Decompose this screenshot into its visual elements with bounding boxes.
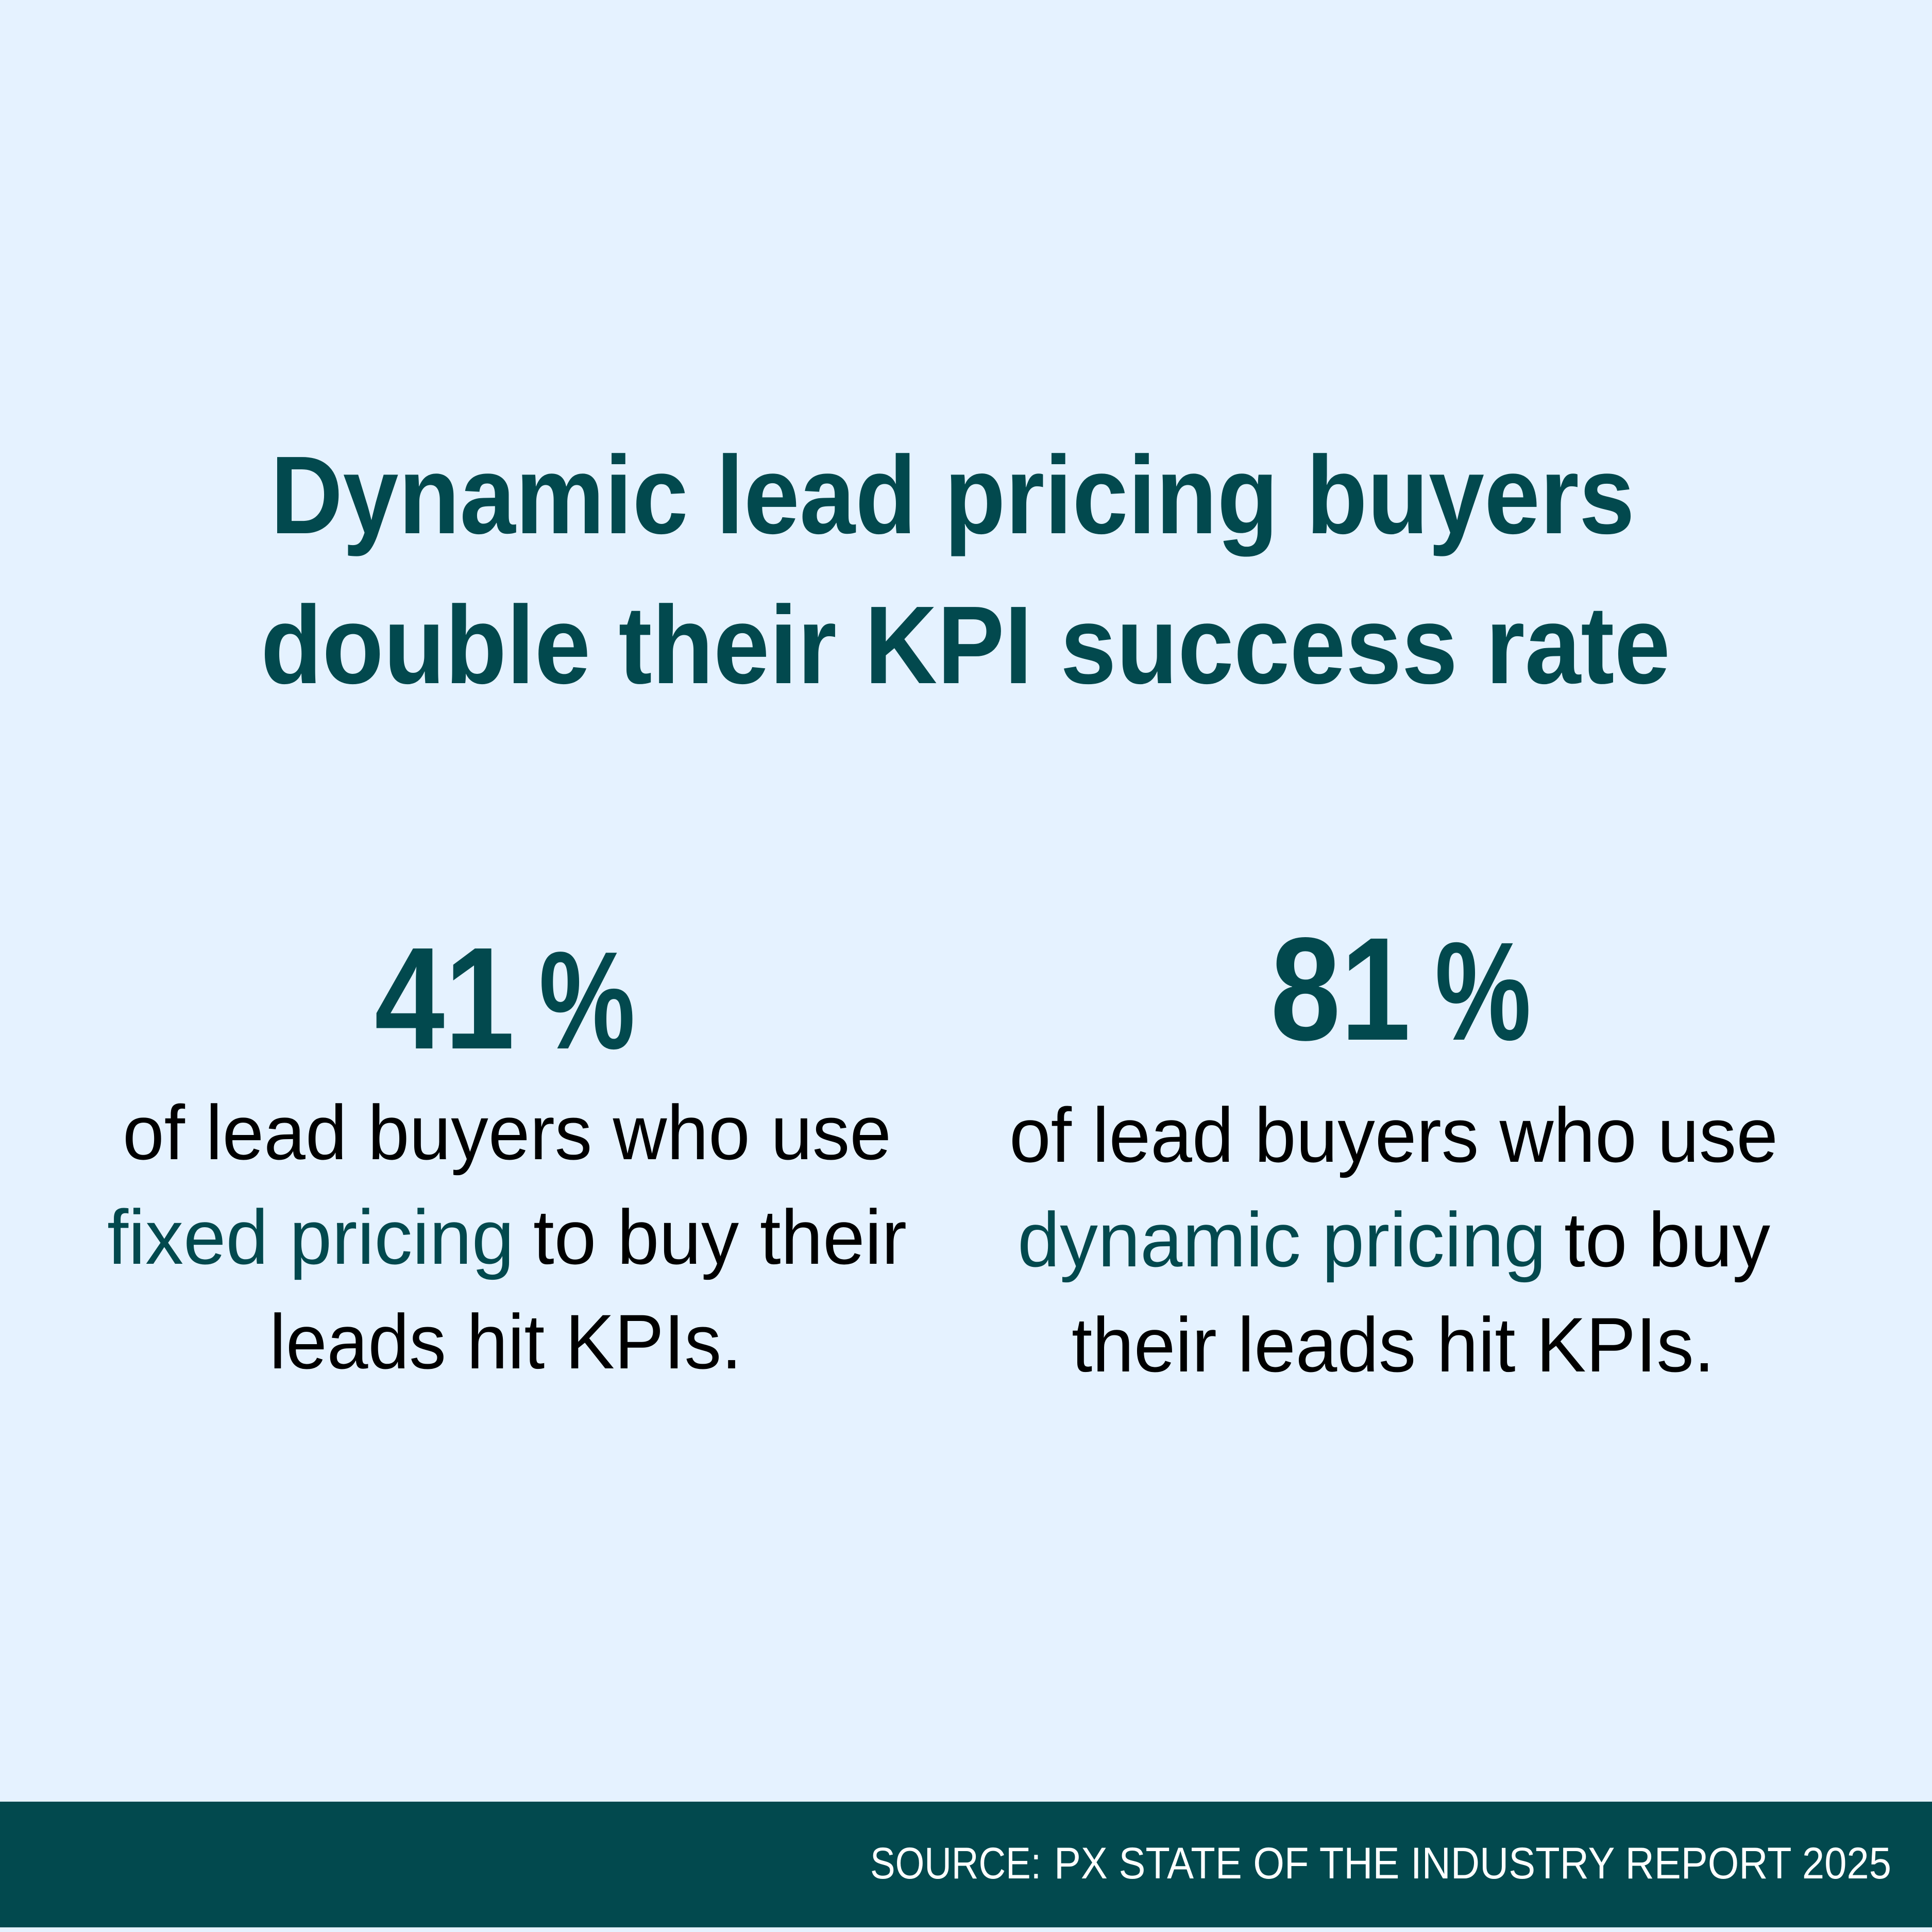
- text block: fixed pricing description: to buy their: [533, 1194, 907, 1280]
- text block: dynamic pricing description: to buy: [1564, 1196, 1770, 1283]
- stat: 81%: [1270, 907, 1531, 1071]
- text block: dynamic pricing description: dynamic pricing: [1018, 1196, 1546, 1283]
- footer band: [0, 1802, 1932, 1927]
- text block: fixed pricing description: of lead buyers who use: [123, 1089, 891, 1176]
- stat: 41%: 41: [375, 917, 515, 1079]
- source note: SOURCE:: [870, 1839, 1041, 1888]
- title: double their KPI success rate: [261, 583, 1670, 707]
- text block: fixed pricing description: [107, 1089, 907, 1385]
- text block: dynamic pricing description: [1009, 1092, 1778, 1388]
- text block: dynamic pricing description: of lead buyers who use: [1009, 1092, 1778, 1178]
- stat: 41%: %: [539, 923, 635, 1078]
- title: Dynamic lead pricing buyers: [270, 433, 1635, 557]
- text block: dynamic pricing description: their leads hit KPIs.: [1072, 1301, 1715, 1388]
- stat: 41%: [375, 917, 635, 1079]
- text block: fixed pricing description: fixed pricing: [107, 1194, 514, 1280]
- panel: fixed pricing stat: [107, 917, 907, 1385]
- title: [261, 433, 1670, 707]
- stat: 81%: %: [1435, 913, 1531, 1070]
- stat: 81%: 81: [1270, 907, 1411, 1071]
- panel: dynamic pricing stat: [1009, 907, 1778, 1388]
- text block: fixed pricing description: leads hit KPIs.: [269, 1298, 742, 1385]
